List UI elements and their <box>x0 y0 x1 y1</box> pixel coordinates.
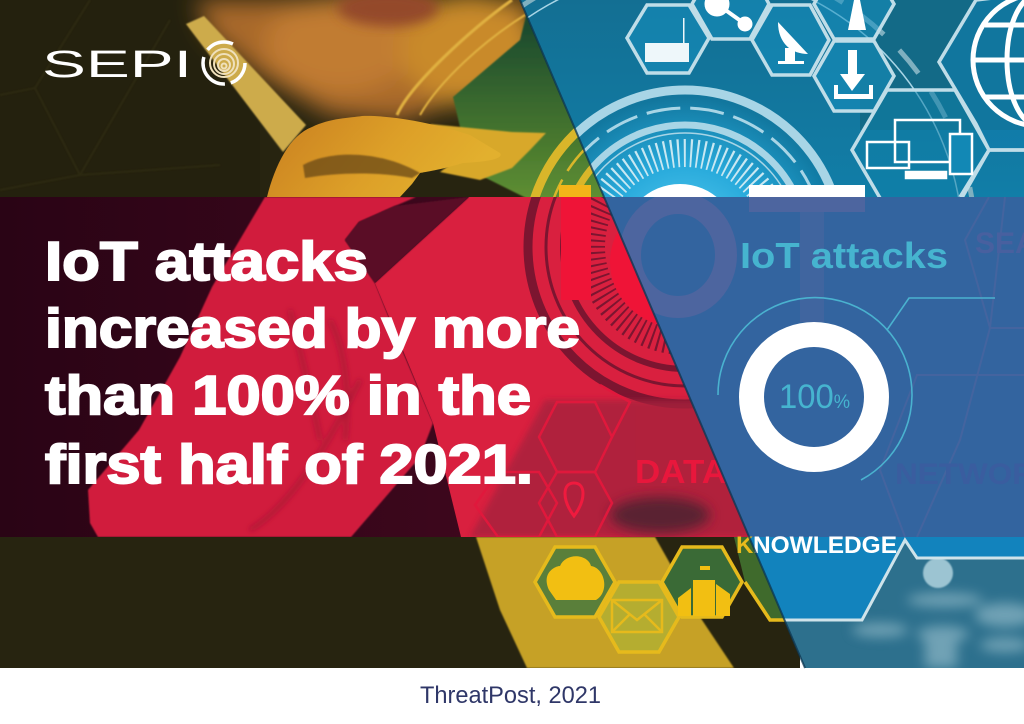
logo wordmark: SEPI <box>42 44 192 86</box>
knowledge hexagon outline <box>745 540 1024 620</box>
rings <box>522 0 974 197</box>
green panel <box>452 15 604 197</box>
main headline: than 100% in the <box>45 364 531 426</box>
second finger <box>430 124 546 180</box>
band: blue right part <box>600 197 1024 537</box>
outer arc <box>718 298 912 480</box>
palm creases <box>250 310 360 530</box>
yellow IoT letter <box>559 185 591 197</box>
band: red left part <box>0 197 748 537</box>
earpiece arcs <box>397 0 525 115</box>
dark ring band <box>524 197 693 408</box>
donut ring <box>752 334 876 460</box>
donut value: 100% <box>779 378 850 416</box>
dark wedge <box>345 197 469 283</box>
white IoT letters <box>644 184 865 197</box>
download icon <box>834 50 873 99</box>
source caption: ThreatPost, 2021 <box>420 682 601 709</box>
up arrow icon <box>848 0 866 30</box>
knowledge word: NOWLEDGE <box>753 532 897 559</box>
main headline: first half of 2021. <box>45 433 533 495</box>
knowledge word: K <box>736 532 754 559</box>
main headline: IoT attacks <box>45 230 368 292</box>
blue strip above lower hexagon <box>905 537 1024 558</box>
faint IoT letters <box>630 203 726 307</box>
diagonal shadow line <box>520 0 805 668</box>
tech panel: blue IoT network artwork <box>520 0 1024 668</box>
globe icon <box>973 0 1024 126</box>
bright red IoT letters <box>561 197 658 324</box>
collar <box>186 16 306 152</box>
hand <box>267 116 501 197</box>
lips <box>338 0 438 26</box>
yellow rings <box>530 128 593 197</box>
data word: DATA <box>635 453 727 490</box>
molecule icon <box>705 0 752 31</box>
lower teal area <box>786 537 1024 668</box>
cloud icon <box>547 556 604 600</box>
faint hex lines <box>880 197 1024 537</box>
main headline <box>45 230 580 495</box>
pin icon <box>565 483 583 516</box>
logo: Sepio <box>42 42 245 86</box>
hand in red <box>88 197 433 537</box>
knowledge hexagon fill <box>750 537 905 618</box>
chart heading: IoT attacks <box>740 235 948 276</box>
building icon <box>678 566 730 616</box>
icon: fingerprint <box>203 42 245 84</box>
faint T letter <box>749 197 865 322</box>
main headline: increased by more <box>45 297 580 359</box>
lower hex tint <box>533 537 785 654</box>
hexagon outlines <box>627 0 1024 210</box>
callout leader line <box>887 298 995 330</box>
router icon <box>645 18 689 62</box>
photo panel: person in yellow duotone <box>0 0 843 668</box>
envelope icon <box>612 600 662 632</box>
devices icon <box>867 120 972 178</box>
right red area <box>375 197 760 537</box>
donut chart: 100% <box>718 298 995 480</box>
red hexagons <box>475 385 630 537</box>
burgundy lower right <box>470 400 760 537</box>
satellite dish icon <box>778 22 808 64</box>
lower sleeve <box>476 537 734 668</box>
